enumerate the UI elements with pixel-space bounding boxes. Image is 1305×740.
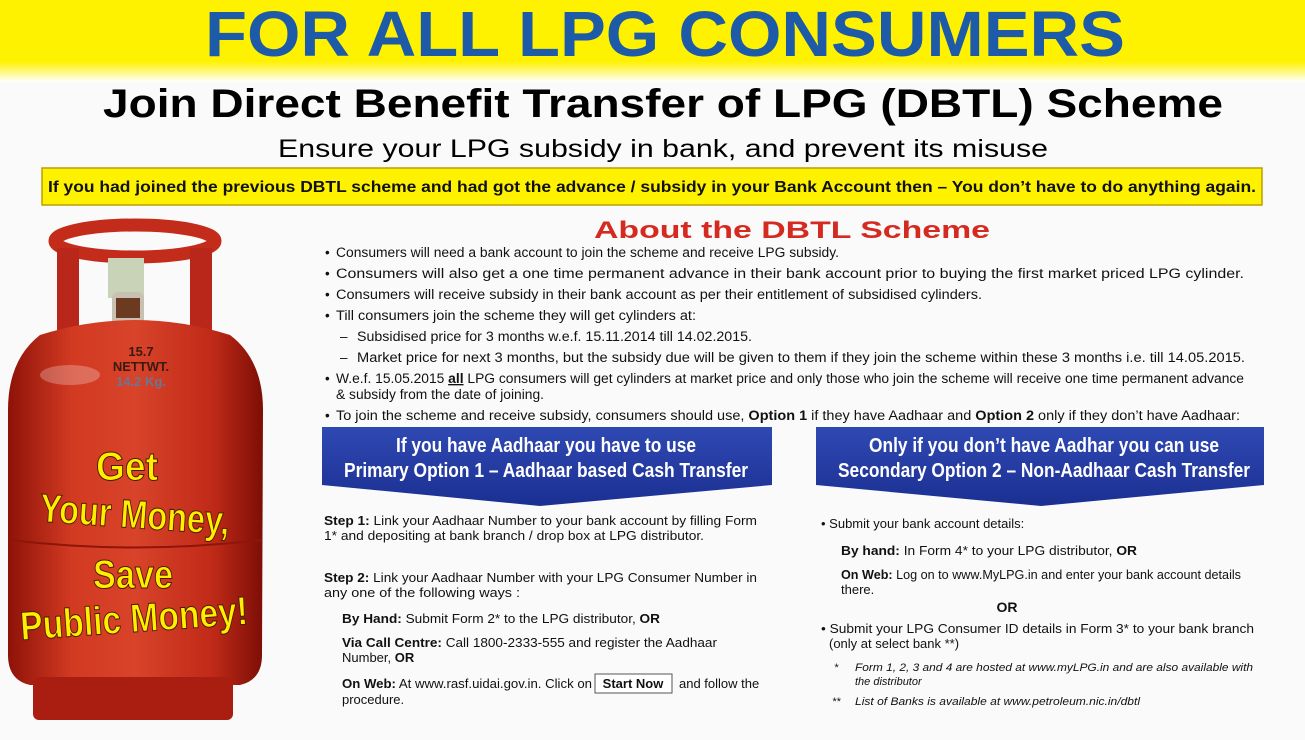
header band <box>0 0 1305 82</box>
bullet list: • <box>325 371 330 386</box>
cylinder label: 15.7 <box>128 344 154 359</box>
bullet list: Consumers will receive subsidy in their bank account as per their entitlement of subsidised cylinders. <box>336 287 982 302</box>
slogan <box>19 445 249 649</box>
cylinder label <box>113 344 169 389</box>
banner: option 1: If you have Aadhaar you have to use <box>396 435 696 457</box>
option 1 steps: Via Call Centre: Call 1800-2333-555 and register the Aadhaar <box>342 635 718 650</box>
banner: option 2: Only if you don’t have Aadhar you can use <box>869 435 1219 457</box>
bullet list: • <box>325 408 330 423</box>
bullet list: Consumers will also get a one time permanent advance in their bank account prior to buying the first market priced LPG cylinder. <box>336 266 1244 281</box>
banner: option 1: Primary Option 1 – Aadhaar based Cash Transfer <box>344 460 748 482</box>
bullet list: Market price for next 3 months, but the subsidy due will be given to them if they join the scheme within these 3 months i.e. till 14.05.2015. <box>357 350 1245 365</box>
handle ring <box>55 225 215 257</box>
option 2 steps: * <box>834 662 839 674</box>
bullet list: • <box>325 287 330 302</box>
section heading: About the DBTL Scheme: About the DBTL Scheme <box>594 217 990 244</box>
option 2 steps <box>821 516 1254 708</box>
heading: Join Direct Benefit Transfer of LPG (DBTL) Scheme <box>103 82 1223 126</box>
banner: option 2: Secondary Option 2 – Non-Aadhaar Cash Transfer <box>838 460 1250 482</box>
bullet list: To join the scheme and receive subsidy, consumers should use, Option 1 if they have Aadhaar and Option 2 only if they don’t have Aadhaar: <box>336 408 1240 423</box>
slogan: Your Money, <box>39 486 231 544</box>
option 2 steps: • Submit your bank account details: <box>821 516 1024 531</box>
bullet list: – <box>340 329 348 344</box>
cylinder label: NETTWT. <box>113 359 169 374</box>
cylinder label: 14.2 Kg. <box>116 374 166 389</box>
option 2 steps: (only at select bank **) <box>829 636 959 651</box>
option 2 steps: ** <box>832 696 841 708</box>
option 1 steps: Step 1: Link your Aadhaar Number to your bank account by filling Form <box>324 513 757 528</box>
bullet list: – <box>340 350 348 365</box>
option 1 steps: 1* and depositing at bank branch / drop box at LPG distributor. <box>324 528 704 543</box>
bullet list: Consumers will need a bank account to join the scheme and receive LPG subsidy. <box>336 245 839 260</box>
option 2 steps: On Web: Log on to www.MyLPG.in and enter your bank account details <box>841 567 1241 582</box>
option 2 steps: • Submit your LPG Consumer ID details in Form 3* to your bank branch <box>821 621 1254 636</box>
bullet list: W.e.f. 15.05.2015 all LPG consumers will get cylinders at market price and only those who join the scheme will receive one time permanent advance <box>336 371 1244 386</box>
option 2 steps: the distributor <box>855 676 923 688</box>
button: Start Now: Start Now <box>603 676 664 691</box>
subtitle: Ensure your LPG subsidy in bank, and prevent its misuse <box>278 135 1048 163</box>
option 2 steps: there. <box>841 582 874 597</box>
notice box: If you had joined the previous DBTL scheme and had got the advance / subsidy in your Bank Account then – You don’t have to do anything again. <box>48 179 1256 196</box>
option 2 steps: By hand: In Form 4* to your LPG distributor, OR <box>841 543 1138 558</box>
slogan: Public Money! <box>19 589 249 649</box>
bullet list <box>325 245 1245 423</box>
bullet list: Subsidised price for 3 months w.e.f. 15.11.2014 till 14.02.2015. <box>357 329 752 344</box>
option 1 steps: Step 2: Link your Aadhaar Number with your LPG Consumer Number in <box>324 570 757 585</box>
bullet list: Till consumers join the scheme they will get cylinders at: <box>336 308 696 323</box>
option 1 steps: By Hand: Submit Form 2* to the LPG distributor, OR <box>342 611 661 626</box>
button: Start Now <box>595 674 672 693</box>
notice box <box>42 168 1262 205</box>
bullet list: • <box>325 266 330 281</box>
option 1 steps <box>324 513 759 707</box>
slogan: Save <box>93 553 173 597</box>
option 1 steps: procedure. <box>342 692 404 707</box>
option 1 steps: Number, OR <box>342 650 415 665</box>
slogan: Get <box>96 445 158 489</box>
option 2 steps: OR <box>996 599 1018 615</box>
option 2 steps: Form 1, 2, 3 and 4 are hosted at www.myLPG.in and are also available with <box>855 662 1253 674</box>
bullet list: • <box>325 308 330 323</box>
bullet list: • <box>325 245 330 260</box>
option 1 steps: On Web: At www.rasf.uidai.gov.in. Click on <box>342 676 592 691</box>
icon: LPG cylinder <box>8 225 263 720</box>
option 1 steps: any one of the following ways : <box>324 585 520 600</box>
title: FOR ALL LPG CONSUMERS <box>205 0 1125 70</box>
banner: option 2 <box>816 427 1264 506</box>
option 1 steps: and follow the <box>679 676 759 691</box>
option 2 steps: List of Banks is available at www.petroleum.nic.in/dbtl <box>855 696 1141 708</box>
banner: option 1 <box>322 427 772 506</box>
bullet list: & subsidy from the date of joining. <box>336 387 544 402</box>
